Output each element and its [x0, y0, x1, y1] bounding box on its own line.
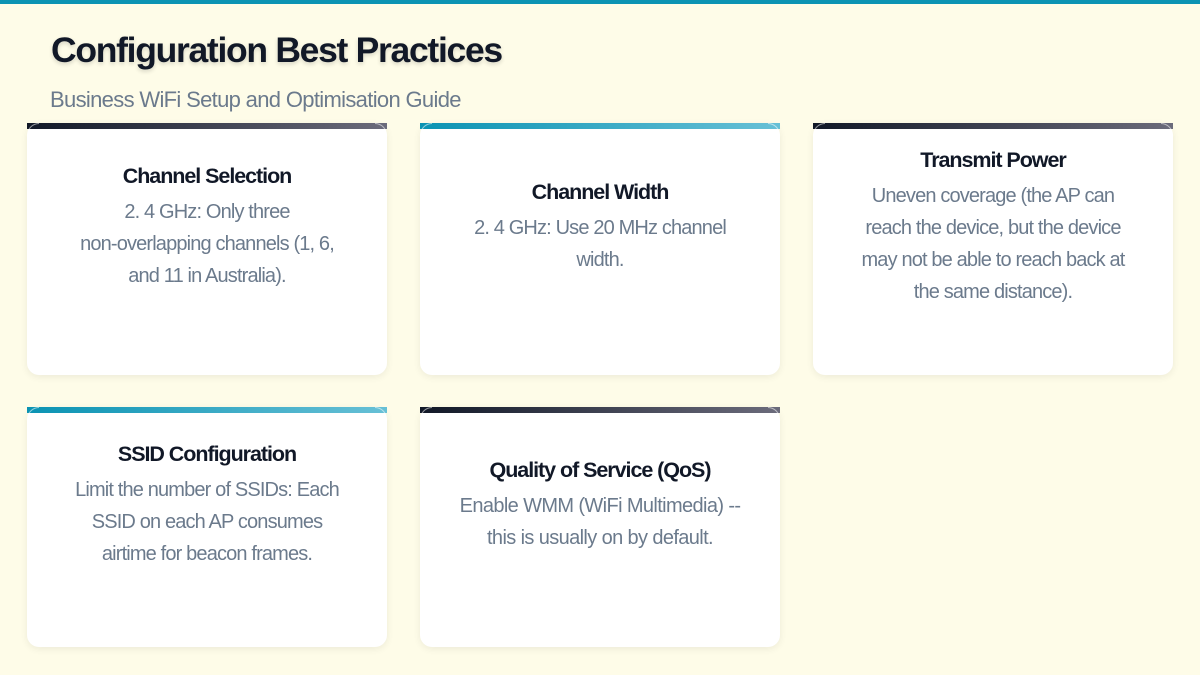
text: channel width: 2. 4 GHz: Use 20 MHz channel — [474, 217, 726, 239]
top accent bar — [0, 0, 1200, 4]
card accent: teal gradient — [27, 407, 387, 413]
text: transmit power: Uneven coverage (the AP can — [872, 185, 1114, 207]
panel: channel width — [420, 123, 780, 375]
panel: quality of service — [420, 407, 780, 647]
heading: channel width: Channel Width — [532, 180, 668, 204]
panel: transmit power — [813, 123, 1173, 375]
text: channel selection: and 11 in Australia). — [128, 265, 286, 287]
card accent: dark gradient — [27, 123, 387, 129]
panel: channel selection — [27, 123, 387, 375]
panel: ssid configuration — [27, 407, 387, 647]
text: ssid configuration: Limit the number of SSIDs: Each — [75, 479, 339, 501]
text: channel selection: non-overlapping channels (1, 6, — [80, 233, 334, 255]
text: transmit power: the same distance). — [914, 281, 1072, 303]
title: Configuration Best Practices — [51, 30, 502, 70]
heading: channel selection: Channel Selection — [123, 164, 291, 188]
text: transmit power: may not be able to reach back at — [862, 249, 1124, 271]
text: ssid configuration — [75, 479, 339, 565]
heading: ssid configuration: SSID Configuration — [118, 442, 296, 466]
text: transmit power — [862, 185, 1126, 303]
subtitle: Business WiFi Setup and Optimisation Guide — [50, 87, 461, 112]
text: channel width: width. — [576, 249, 624, 271]
text: transmit power: reach the device, but the device — [865, 217, 1121, 239]
card accent: dark gradient — [813, 123, 1173, 129]
text: quality of service: this is usually on by default. — [487, 527, 713, 549]
text: ssid configuration: SSID on each AP consumes — [92, 511, 322, 533]
text: channel width — [474, 217, 726, 271]
card accent: teal gradient — [420, 123, 780, 129]
heading: transmit power: Transmit Power — [920, 148, 1066, 172]
text: quality of service — [460, 495, 740, 549]
heading: quality of service: Quality of Service (QoS) — [490, 458, 710, 482]
text: channel selection: 2. 4 GHz: Only three — [124, 201, 290, 223]
text: ssid configuration: airtime for beacon frames. — [102, 543, 312, 565]
text: quality of service: Enable WMM (WiFi Multimedia) -- — [460, 495, 740, 517]
text: channel selection — [80, 201, 334, 287]
card accent: dark gradient — [420, 407, 780, 413]
